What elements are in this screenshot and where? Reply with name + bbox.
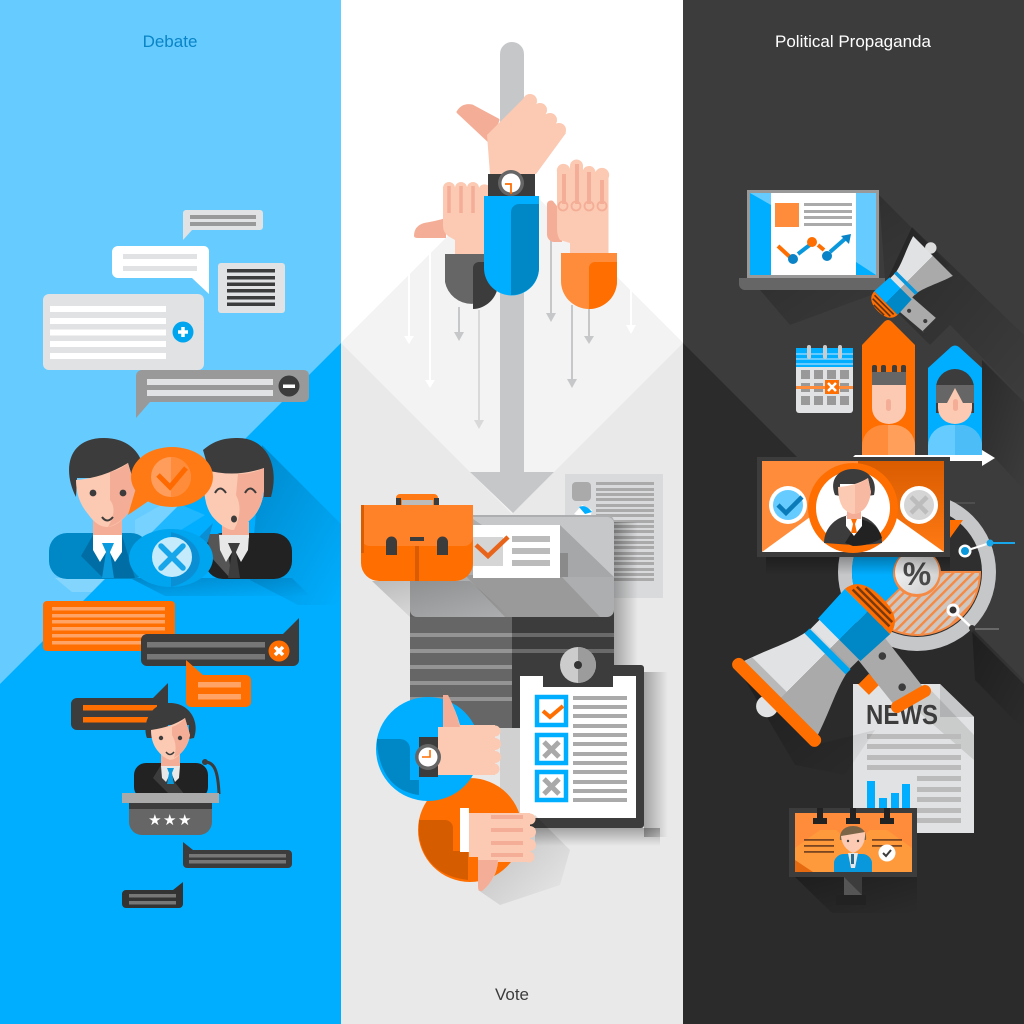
long shadow: billboard — [795, 877, 917, 913]
man: left — [49, 438, 149, 579]
icon: thumbs up with blue circle — [376, 695, 501, 801]
illustration: two debating men — [49, 438, 341, 605]
document: background sheet — [565, 474, 663, 598]
man: right — [203, 438, 292, 579]
heading: Debate: Debate — [143, 32, 197, 51]
speech bubble: small orange — [186, 660, 251, 707]
long shadow: candidates — [982, 360, 1024, 490]
panel: vote background — [341, 0, 683, 1024]
icon: orange briefcase — [361, 494, 473, 581]
icon: small megaphone — [858, 229, 978, 349]
panel: debate background — [0, 0, 341, 1024]
illustration: speaker at podium: ★★★ — [148, 812, 193, 829]
checkbox: crossed second — [537, 772, 566, 800]
speech bubble: small grey — [183, 210, 263, 240]
mini candidate — [834, 826, 872, 872]
speech bubble: dark lower left — [122, 882, 183, 908]
speech bubble: orange check — [128, 447, 213, 515]
long shadow: ballot box — [614, 522, 638, 692]
arrow: white timeline — [852, 450, 995, 466]
icon: large megaphone — [720, 555, 947, 782]
long shadow: thumbs — [478, 815, 570, 905]
icon: monitor with candidate — [757, 457, 950, 575]
icon: calendar — [796, 345, 853, 413]
illustration: speaker at podium — [122, 703, 219, 835]
speech bubble: dark with orange lines — [71, 683, 168, 730]
candidate portrait — [824, 469, 882, 546]
heading: Political Propaganda: Political Propaganda — [775, 32, 932, 51]
checkbox: ticked — [537, 697, 566, 725]
raised hand: centre with blue sleeve and watch — [458, 94, 566, 295]
checkbox: crossed first — [537, 735, 566, 763]
panel: large text card with plus — [43, 294, 204, 370]
speech bubble: dark lower right — [183, 842, 292, 868]
icon: billboard with candidate — [789, 808, 917, 905]
text note: grey sheet — [218, 263, 285, 313]
icon: laptop with chart — [739, 190, 885, 290]
long shadow: briefcase — [372, 581, 510, 617]
raised hand: left with grey sleeve — [414, 182, 498, 309]
long shadow: large megaphone — [745, 680, 875, 775]
arrow: central pole pointing down — [470, 42, 554, 513]
speech bubble: blue cross — [129, 523, 213, 587]
illustration: ballot box — [410, 515, 614, 728]
candidate tag: blue — [928, 346, 982, 455]
icon: checklist clipboard — [520, 647, 644, 828]
chart: donut percentage — [838, 493, 1024, 730]
panel: propaganda background — [683, 0, 1024, 1024]
candidate tag: orange — [862, 320, 915, 455]
chart: donut percentage: % — [903, 556, 931, 592]
speech bubble: white — [112, 246, 209, 294]
voting ballot card — [473, 525, 568, 578]
long shadow: laptop — [760, 195, 950, 325]
icon: approve check — [769, 486, 807, 524]
long shadow: small megaphone — [880, 227, 1024, 400]
icon: thumbs down with orange circle — [418, 778, 536, 891]
document: news sheet: NEWS — [866, 699, 938, 730]
speech bubble: orange lined — [43, 601, 175, 651]
document: news sheet — [853, 684, 974, 833]
arrows: falling votes — [404, 240, 636, 429]
heading: Vote: Vote — [495, 985, 529, 1004]
long shadow: clipboard — [500, 672, 668, 846]
long shadow: men — [55, 445, 341, 605]
speech bubble: grey with minus — [136, 370, 309, 418]
raised hand: right with orange sleeve — [547, 160, 617, 309]
speech bubble: dark with cross — [141, 618, 299, 666]
icon: reject cross — [900, 486, 938, 524]
